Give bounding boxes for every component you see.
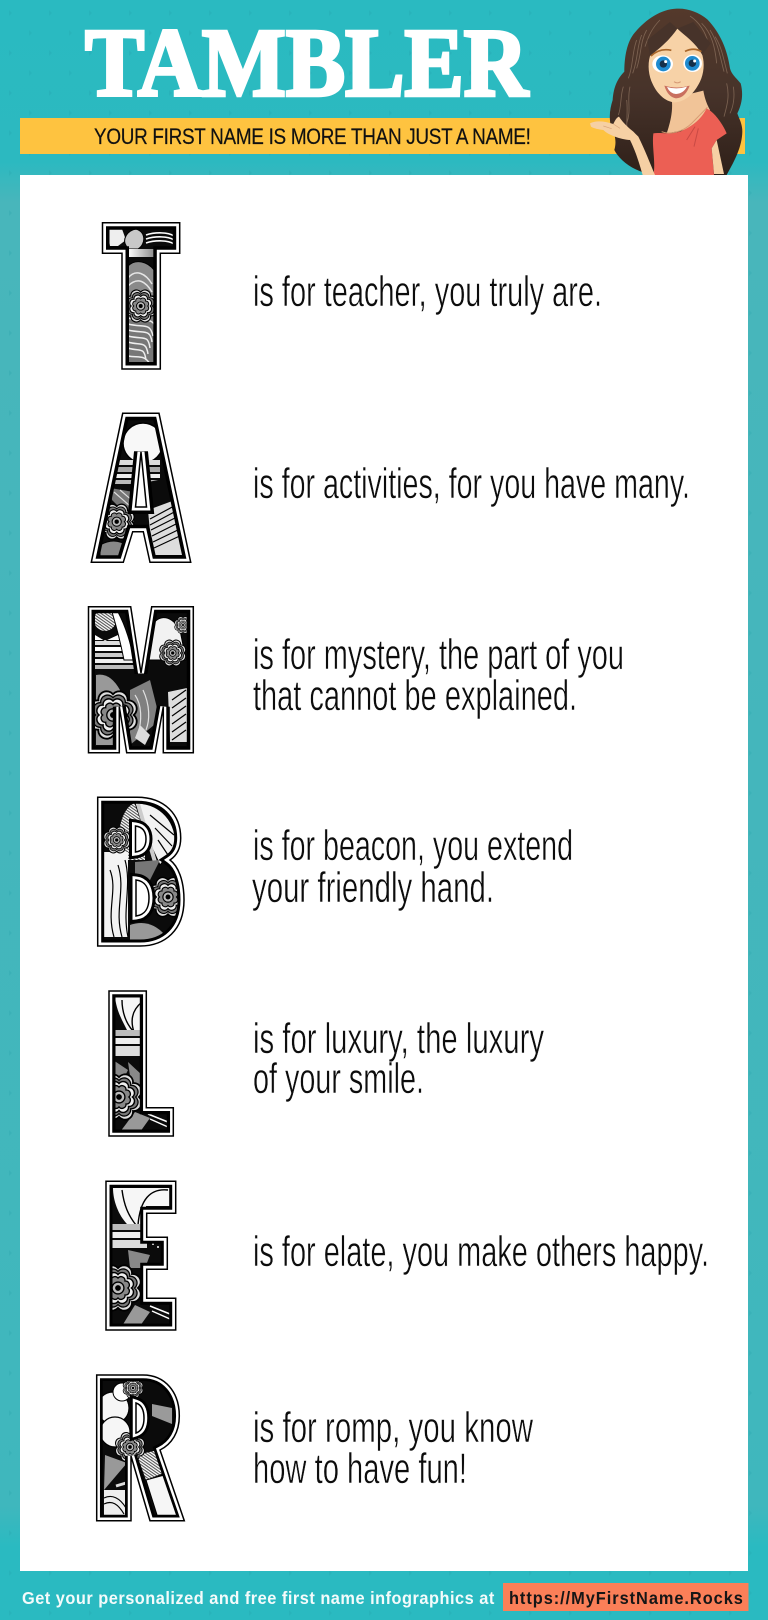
statement B: is for beacon, you extend	[253, 823, 573, 870]
statement L	[253, 1016, 545, 1103]
statement M	[253, 632, 624, 720]
letter B	[96, 795, 188, 948]
statement B	[252, 823, 573, 912]
letter R	[95, 1373, 187, 1523]
footer note: Get your personalized and free first name infographics at	[22, 1587, 495, 1608]
statement L: of your smile.	[253, 1056, 424, 1103]
title: TAMBLER	[85, 9, 529, 116]
letter L	[108, 990, 174, 1137]
letter E	[105, 1180, 176, 1331]
statement T: is for teacher, you truly are.	[253, 269, 602, 316]
statement R: is for romp, you know	[253, 1405, 533, 1452]
statement L: is for luxury, the luxury	[253, 1016, 545, 1063]
statement B: your friendly hand.	[252, 865, 494, 912]
statement M: that cannot be explained.	[253, 673, 577, 720]
statement R: how to have fun!	[253, 1446, 467, 1493]
letter T	[100, 220, 182, 372]
footer url badge: https://MyFirstName.Rocks	[509, 1587, 743, 1608]
illustration: woman presenting	[590, 9, 742, 175]
subtitle band	[20, 118, 745, 154]
subtitle: YOUR FIRST NAME IS MORE THAN JUST A NAME!	[94, 125, 531, 149]
statement R	[253, 1405, 533, 1493]
letter M	[86, 605, 196, 755]
letter A	[90, 410, 192, 565]
